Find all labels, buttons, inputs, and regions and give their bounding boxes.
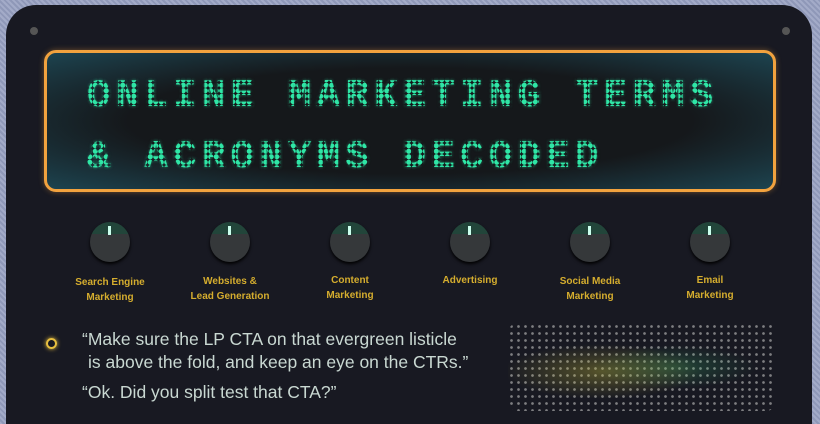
indicator light: [46, 338, 57, 349]
quote text: [82, 329, 468, 402]
main panel: Advertising: [442, 275, 498, 286]
main panel: Social Media: [560, 276, 620, 287]
main panel: Email: [697, 275, 723, 286]
knobs with labels: [75, 222, 734, 303]
main panel: is above the fold, and keep an eye on the CTRs.”: [88, 352, 468, 372]
main panel: Search Engine: [75, 277, 145, 288]
main panel: Marketing: [686, 290, 734, 301]
display screen title: [44, 50, 776, 192]
main panel: “Ok. Did you split test that CTA?”: [82, 382, 336, 402]
display screen title: ONLINE MARKETING TERMS & ACRONYMS DECODED: [87, 74, 718, 179]
dot matrix grid: [508, 323, 776, 411]
main panel: Lead Generation: [191, 291, 269, 302]
main panel: Marketing: [326, 290, 374, 301]
main panel: Websites &: [203, 276, 257, 287]
screws: [30, 27, 790, 35]
main panel: Content: [331, 275, 369, 286]
main panel: “Make sure the LP CTA on that evergreen listicle: [82, 329, 457, 349]
main panel: Marketing: [566, 291, 614, 302]
main panel: Marketing: [86, 292, 134, 303]
